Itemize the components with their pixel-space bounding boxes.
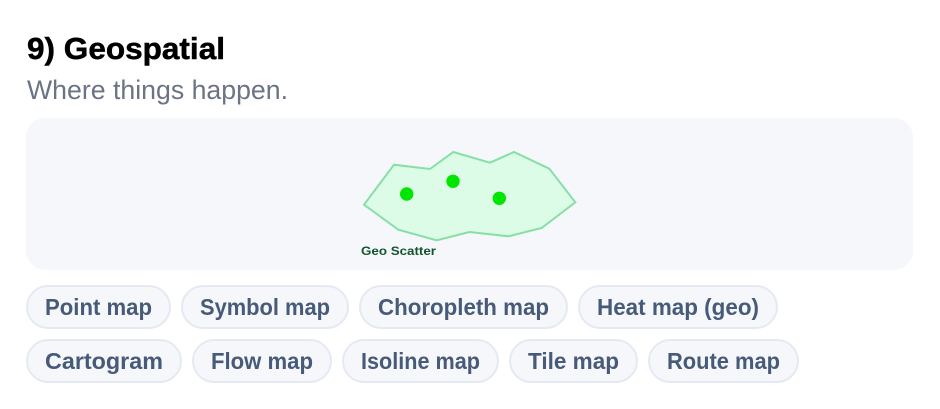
- chart label: Geo Scatter: [361, 244, 436, 258]
- chip: Point map: [27, 286, 170, 328]
- title: 9) Geospatial: [27, 31, 225, 66]
- chip: Symbol map: [182, 286, 348, 328]
- chip: Route map: [649, 340, 798, 382]
- chip: Symbol map: Symbol map: [200, 294, 330, 320]
- chip: Point map: Point map: [45, 294, 152, 320]
- map region polygon: [364, 152, 575, 240]
- data points: [400, 175, 506, 205]
- panel: geo scatter chart: [26, 118, 913, 270]
- chip: Heat map (geo): Heat map (geo): [597, 294, 759, 320]
- chip: Flow map: [193, 340, 331, 382]
- chip: Choropleth map: Choropleth map: [378, 294, 549, 320]
- chip: Route map: Route map: [667, 348, 780, 374]
- chip: Tile map: Tile map: [528, 348, 619, 374]
- chip: Choropleth map: [360, 286, 567, 328]
- chip: Cartogram: [27, 340, 181, 382]
- subtitle: Where things happen.: [27, 75, 288, 105]
- chip: Cartogram: Cartogram: [45, 348, 163, 374]
- chip: Heat map (geo): [579, 286, 777, 328]
- chip list: [27, 286, 798, 382]
- chip: Isoline map: [343, 340, 498, 382]
- chip: Tile map: [510, 340, 637, 382]
- chip: Flow map: Flow map: [211, 348, 313, 374]
- chip: Isoline map: Isoline map: [361, 348, 480, 374]
